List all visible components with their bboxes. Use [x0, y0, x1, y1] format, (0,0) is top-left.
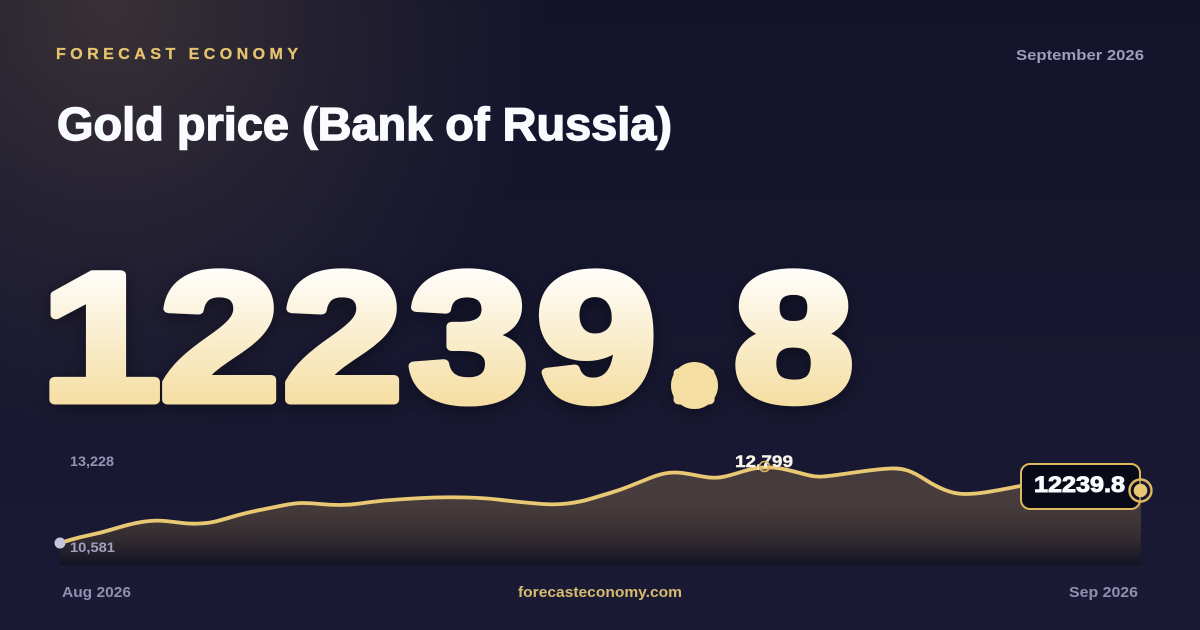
area chart: [54, 452, 1152, 565]
start point: [54, 538, 66, 548]
peak label: 12,799: [735, 452, 793, 471]
peak marker: [760, 462, 770, 472]
axis max label: 13,228: [70, 454, 115, 469]
website label: forecasteconomy.com: [518, 585, 682, 601]
end date label: Sep 2026: [1069, 585, 1138, 601]
title: Gold price (Bank of Russia): [57, 98, 672, 150]
current value callout: [1021, 464, 1140, 509]
date label: September 2026: [1016, 47, 1144, 64]
big value: 12239.8: [41, 236, 853, 439]
current value callout: 12239.8: [1034, 472, 1125, 497]
chart line: [60, 467, 1025, 543]
start date label: Aug 2026: [62, 585, 131, 601]
brand label: FORECAST ECONOMY: [56, 46, 298, 63]
axis min label: 10,581: [70, 540, 116, 555]
end marker: [1130, 480, 1152, 502]
chart area fill: [60, 467, 1141, 565]
